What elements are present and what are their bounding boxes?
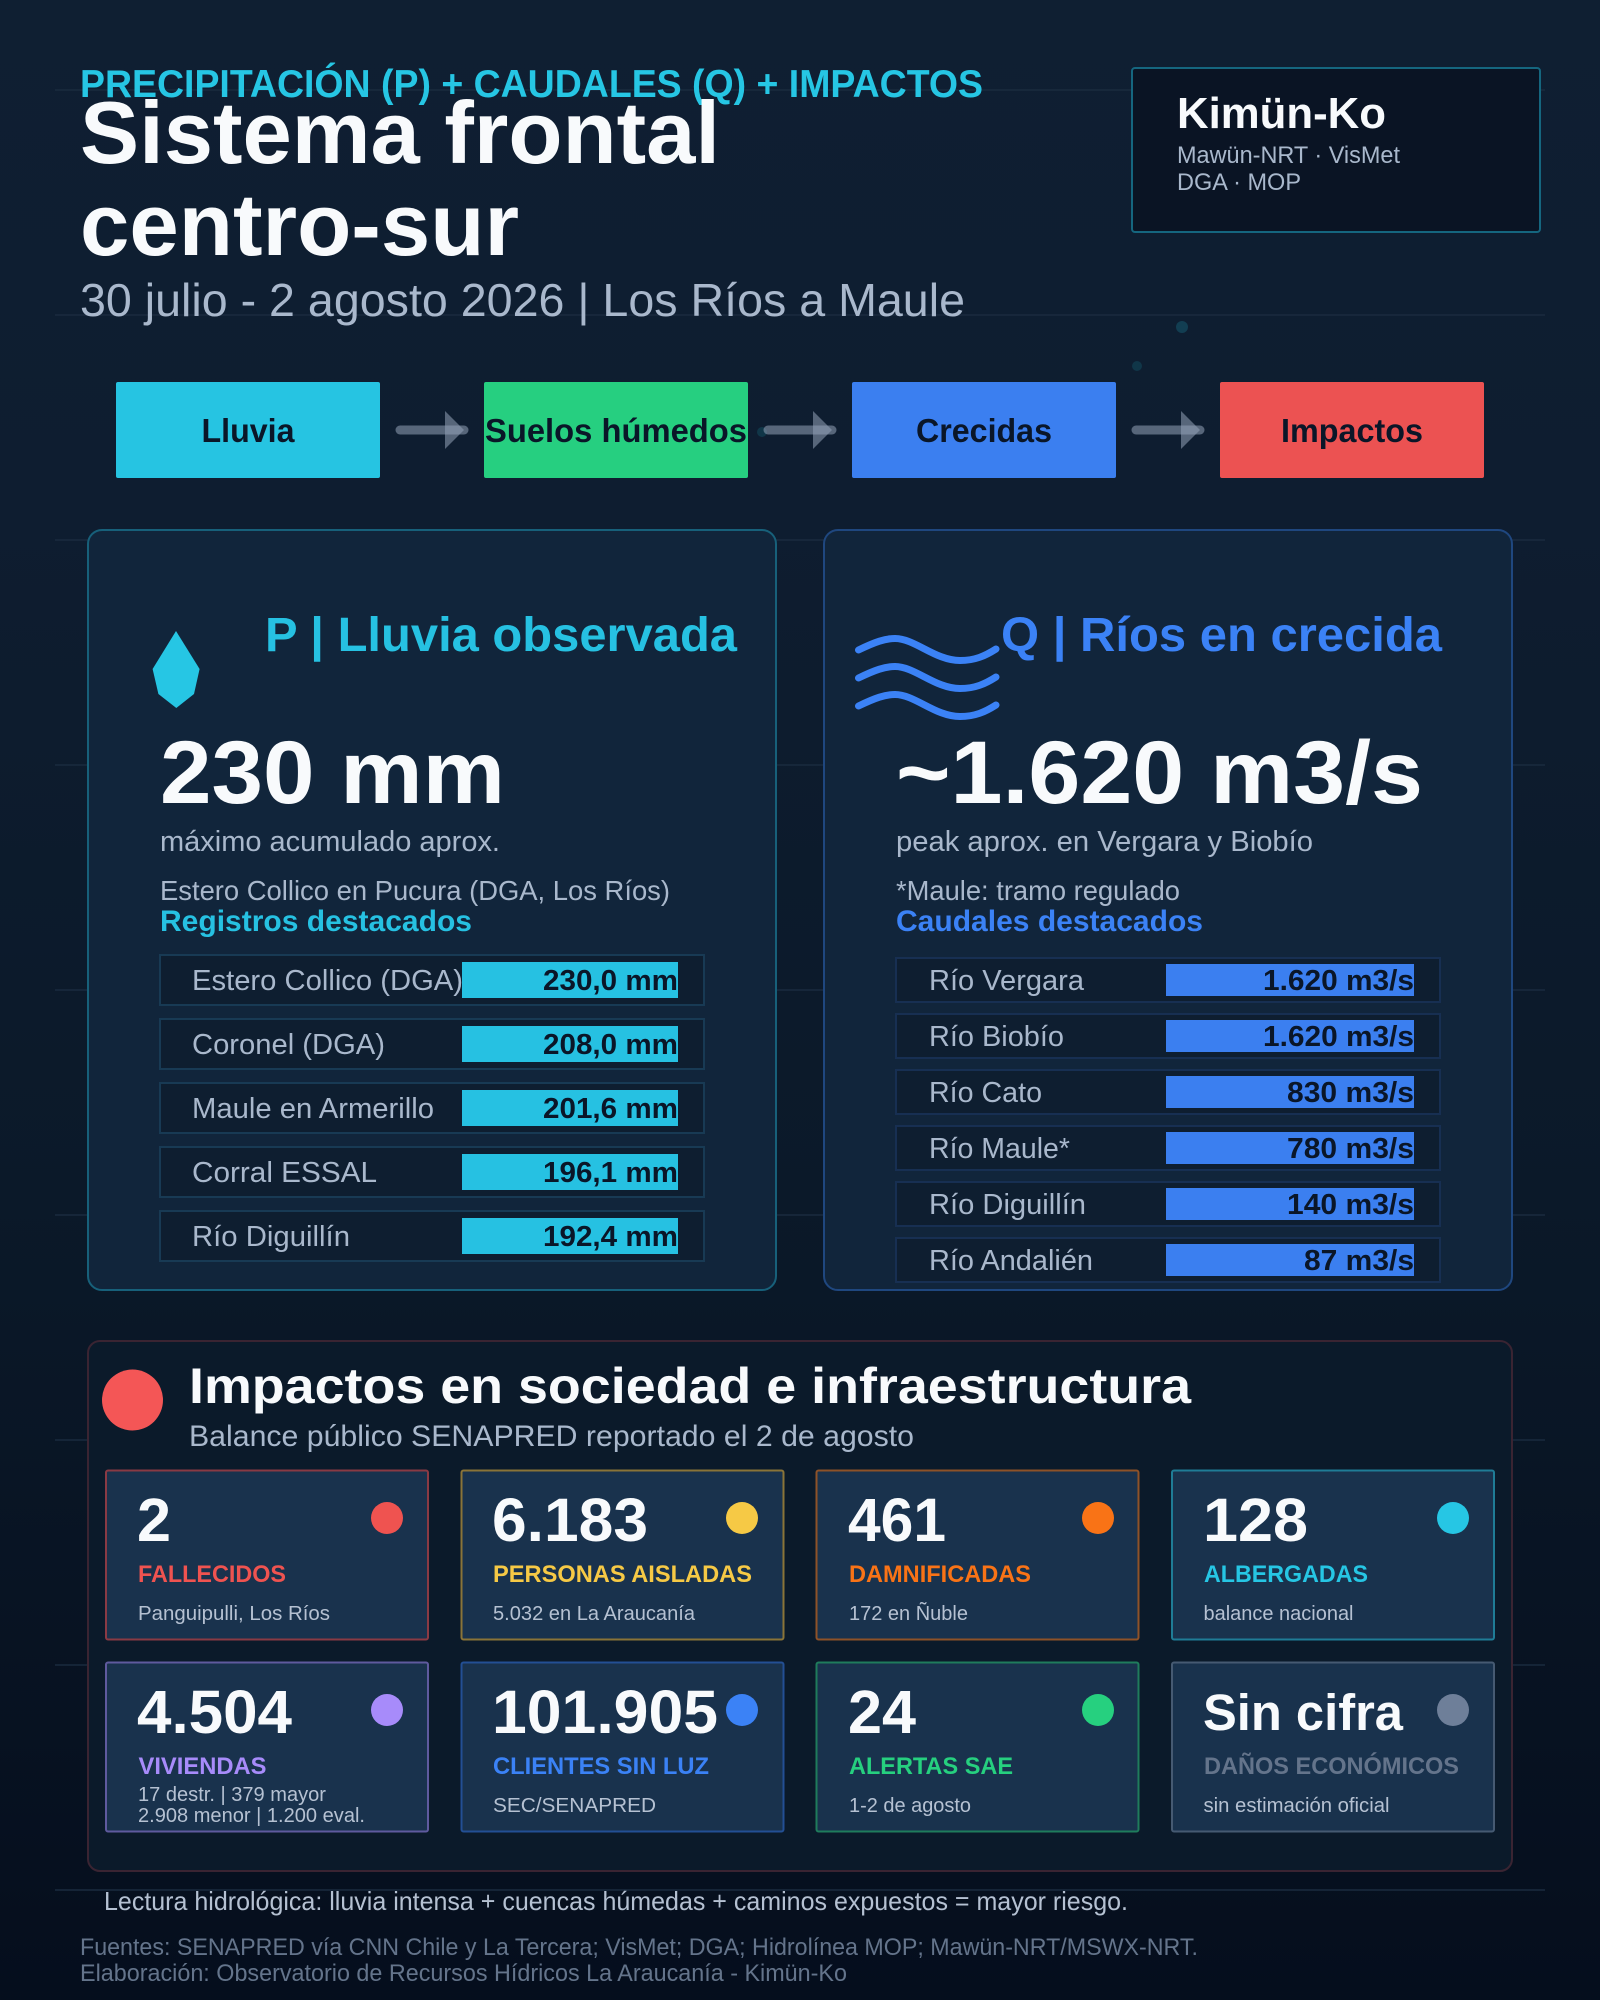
card: clientes sin luz <box>462 1662 784 1832</box>
title <box>80 83 720 274</box>
big number: ~1.620 m3/s <box>896 722 1423 822</box>
title: centro-sur <box>80 175 519 274</box>
row: Coronel: 208,0 mm <box>543 1029 678 1061</box>
card: personas aisladas <box>462 1470 784 1640</box>
row: Río Biobío: 1.620 m3/s <box>1263 1021 1414 1053</box>
panel heading: P | Lluvia observada <box>265 609 737 662</box>
row: Río Vergara <box>896 958 1440 1002</box>
row: Corral ESSAL <box>160 1147 704 1197</box>
row: Maule en Armerillo: 201,6 mm <box>543 1093 678 1125</box>
card: albergadas: balance nacional <box>1204 1602 1354 1625</box>
card: personas aisladas: 6.183 <box>492 1486 648 1554</box>
card: damnificadas: 461 <box>848 1486 946 1554</box>
card: damnificadas <box>816 1470 1138 1640</box>
row: Estero Collico <box>160 955 704 1005</box>
card: albergadas: 128 <box>1203 1486 1308 1554</box>
row: Río Diguillín: 192,4 mm <box>543 1221 678 1253</box>
step: Crecidas: Crecidas <box>916 412 1052 449</box>
row: Río Diguillín: Río Diguillín <box>929 1189 1086 1221</box>
row: Corral ESSAL: Corral ESSAL <box>192 1157 377 1189</box>
row: Coronel <box>160 1019 704 1069</box>
step: Suelos húmedos <box>484 382 748 478</box>
impacts subtitle: Balance público SENAPRED reportado el 2 de agosto <box>189 1420 914 1453</box>
row: Río Biobío <box>896 1014 1440 1058</box>
row: Maule en Armerillo: Maule en Armerillo <box>192 1093 434 1125</box>
row: Río Andalién: 87 m3/s <box>1304 1245 1414 1277</box>
brand box: Kimün-Ko <box>1177 89 1386 138</box>
row: Corral ESSAL: 196,1 mm <box>543 1157 678 1189</box>
card: fallecidos: 2 <box>137 1486 171 1554</box>
card: clientes sin luz: 101.905 <box>492 1678 718 1746</box>
card: viviendas: VIVIENDAS <box>138 1753 266 1780</box>
list heading: Caudales destacados <box>896 905 1203 938</box>
step: Suelos húmedos: Suelos húmedos <box>485 412 747 449</box>
card: albergadas <box>1172 1470 1494 1640</box>
row: Río Cato <box>896 1070 1440 1114</box>
row: Río Biobío: Río Biobío <box>929 1021 1064 1053</box>
card: fallecidos <box>106 1470 428 1640</box>
sources <box>80 1934 1198 1987</box>
card: alertas SAE: ALERTAS SAE <box>849 1753 1013 1780</box>
step: Impactos: Impactos <box>1281 412 1423 449</box>
eyebrow heading: PRECIPITACIÓN (P) + CAUDALES (Q) + IMPACTOS <box>80 62 983 106</box>
station note: Estero Collico en Pucura (DGA, Los Ríos) <box>160 875 670 906</box>
brand box <box>1132 68 1540 232</box>
card: alertas SAE <box>816 1662 1138 1832</box>
panel heading: Q | Ríos en crecida <box>1001 609 1442 662</box>
card: viviendas: 2.908 menor | 1.200 eval. <box>138 1804 365 1827</box>
row: Río Andalién: Río Andalién <box>929 1245 1093 1277</box>
card: damnificadas: DAMNIFICADAS <box>849 1561 1031 1588</box>
title: Sistema frontal <box>80 83 720 182</box>
row: Río Cato: 830 m3/s <box>1287 1077 1414 1109</box>
row: Río Vergara: Río Vergara <box>929 965 1085 997</box>
row: Río Andalién <box>896 1238 1440 1282</box>
step: Crecidas <box>852 382 1116 478</box>
row: Río Diguillín: 140 m3/s <box>1287 1189 1414 1221</box>
list heading: Registros destacados <box>160 905 472 938</box>
row: Río Diguillín <box>896 1182 1440 1226</box>
row: Río Diguillín <box>160 1211 704 1261</box>
big number: 230 mm <box>160 722 505 822</box>
row: Río Diguillín: Río Diguillín <box>192 1221 350 1253</box>
card: daños económicos <box>1172 1662 1494 1832</box>
process flow <box>116 382 1484 478</box>
icon: waves <box>858 638 996 716</box>
card: clientes sin luz: SEC/SENAPRED <box>493 1794 656 1817</box>
arrow 2 <box>768 411 832 449</box>
takeaway note: Lectura hidrológica: lluvia intensa + cuencas húmedas + caminos expuestos = mayor riesgo. <box>104 1886 1128 1916</box>
icon: water drop <box>153 631 200 708</box>
card: personas aisladas: 5.032 en La Araucanía <box>493 1602 696 1625</box>
panel: river flow <box>824 530 1512 1290</box>
step: Impactos <box>1220 382 1484 478</box>
panel: precipitation <box>88 530 776 1290</box>
row: Río Maule: 780 m3/s <box>1287 1133 1414 1165</box>
card: albergadas: ALBERGADAS <box>1204 1561 1368 1588</box>
card: viviendas: 17 destr. | 379 mayor <box>138 1783 326 1806</box>
arrow 3 <box>1136 411 1200 449</box>
card: viviendas <box>106 1662 428 1832</box>
card: clientes sin luz: CLIENTES SIN LUZ <box>493 1753 709 1780</box>
card: personas aisladas: PERSONAS AISLADAS <box>493 1561 752 1588</box>
row: Maule en Armerillo <box>160 1083 704 1133</box>
brand box: DGA · MOP <box>1177 169 1301 196</box>
row: Río Maule <box>896 1126 1440 1170</box>
card: fallecidos: FALLECIDOS <box>138 1561 286 1588</box>
impacts heading: Impactos en sociedad e infraestructura <box>189 1358 1192 1414</box>
card: daños económicos: DAÑOS ECONÓMICOS <box>1204 1752 1459 1780</box>
card: daños económicos: Sin cifra <box>1203 1684 1404 1741</box>
step: Lluvia <box>116 382 380 478</box>
sources: Fuentes: SENAPRED vía CNN Chile y La Tercera; VisMet; DGA; Hidrolínea MOP; Mawün-NRT/MSWX-NRT. <box>80 1934 1198 1961</box>
card: alertas SAE: 24 <box>848 1678 916 1746</box>
row: Río Cato: Río Cato <box>929 1077 1042 1109</box>
description: peak aprox. en Vergara y Biobío <box>896 826 1313 858</box>
subtitle: 30 julio - 2 agosto 2026 | Los Ríos a Maule <box>80 274 965 326</box>
step: Lluvia: Lluvia <box>202 412 295 449</box>
card: fallecidos: Panguipulli, Los Ríos <box>138 1602 330 1625</box>
row: Estero Collico: Estero Collico (DGA) <box>192 965 463 997</box>
card: damnificadas: 172 en Ñuble <box>849 1602 968 1625</box>
panel: impacts <box>88 1341 1512 1871</box>
row: Coronel: Coronel (DGA) <box>192 1029 385 1061</box>
note: *Maule: tramo regulado <box>896 875 1180 906</box>
card: viviendas: 4.504 <box>137 1678 292 1746</box>
card: daños económicos: sin estimación oficial <box>1204 1794 1390 1817</box>
row: Estero Collico: 230,0 mm <box>543 965 678 997</box>
row: Río Maule: Río Maule* <box>929 1133 1070 1165</box>
row: Río Vergara: 1.620 m3/s <box>1263 965 1414 997</box>
arrow 1 <box>400 411 464 449</box>
card: alertas SAE: 1-2 de agosto <box>849 1794 971 1817</box>
description: máximo acumulado aprox. <box>160 826 500 858</box>
brand box: Mawün-NRT · VisMet <box>1177 142 1400 169</box>
icon: red alert dot <box>102 1370 163 1430</box>
sources: Elaboración: Observatorio de Recursos Hídricos La Araucanía - Kimün-Ko <box>80 1960 847 1987</box>
